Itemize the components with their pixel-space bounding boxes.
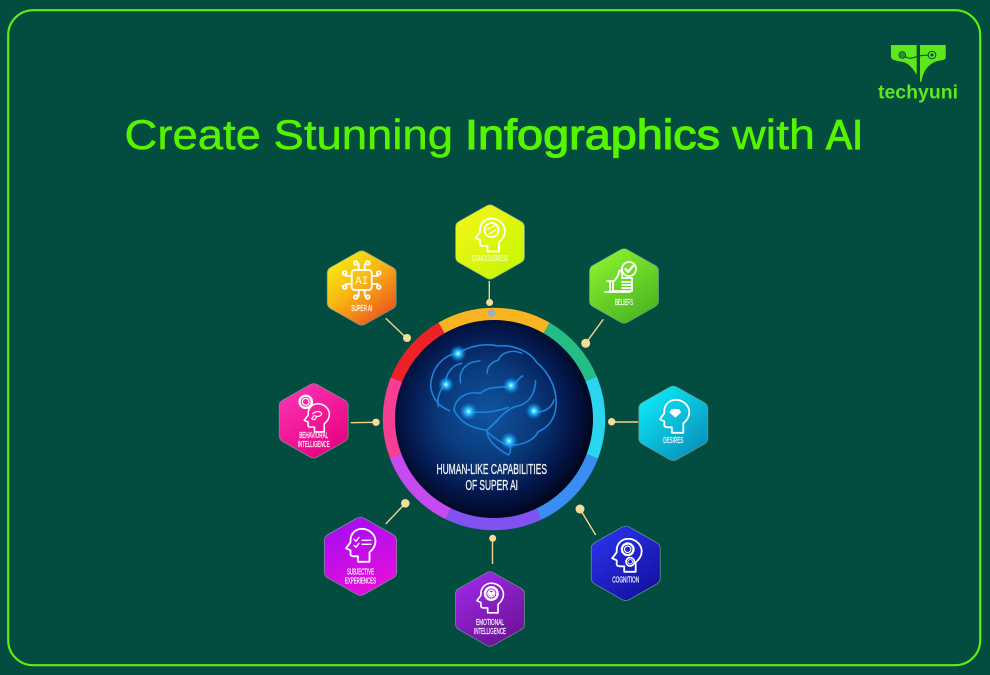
icon: head with ball [476,218,505,252]
central brain disc [395,320,593,518]
logo: techyuni [878,45,958,104]
title: with [731,111,815,158]
brain illustration [431,345,556,455]
hexagon: beliefs [590,249,658,323]
hexagon: consciousness [456,205,524,279]
title: Infographics [465,111,720,158]
hexagon: beliefs: BELIEFS [615,298,633,307]
hexagon: cognition: COGNITION [612,575,639,584]
hexagon: desires: DESIRES [663,436,683,445]
hexagon: subjective experiences [324,517,397,595]
hexagon: super AI: SUPER AI [351,304,372,313]
hexagon: consciousness: CONCIOUSNESS [472,254,508,263]
connector: beliefs [581,319,603,348]
hexagon: subjective experiences: SUBJECTIVE [347,567,374,576]
connector: emotional intelligence [489,535,496,564]
hexagon: subjective experiences: EXPERIENCES [345,576,376,585]
icon: head with gears [612,539,642,572]
icon: AI chip [343,261,381,299]
centre caption [436,462,547,494]
connector: consciousness [486,281,496,317]
logo: techyuni: techyuni [878,82,958,104]
icon: head with checklist [346,529,376,562]
connector: behavioral intelligence [351,419,380,426]
central ring [389,314,599,524]
hexagon: behavioral intelligence: INTELLIGENCE [298,440,330,449]
brain glowing nodes [438,345,542,450]
hexagon: behavioral intelligence: BEHAVIORAL [299,431,329,440]
hexagon: cognition [591,526,660,601]
icon: head with heart gear [477,583,503,613]
connector: super AI [386,318,411,342]
centre caption: HUMAN-LIKE CAPABILITIES [436,462,547,478]
hexagon: super AI: AI [355,276,368,288]
centre caption: OF SUPER AI [466,478,518,494]
hexagon: emotional intelligence [456,572,524,646]
title: AI [826,111,863,158]
connector: cognition [576,504,596,535]
icon: head with diamond [660,400,689,433]
connector: subjective experiences [386,499,410,524]
title: Create Stunning [124,111,453,158]
hexagon: super AI [327,251,396,325]
hexagon: behavioral intelligence [279,384,348,458]
connector: desires [608,418,638,425]
icon: head with gear [300,396,329,432]
hexagon: emotional intelligence: EMOTIONAL [476,618,504,627]
title [124,111,863,158]
hexagon: desires [639,386,708,461]
hexagon: emotional intelligence: INTELLIGENCE [474,627,506,636]
icon: thumbs up and check [605,262,636,292]
